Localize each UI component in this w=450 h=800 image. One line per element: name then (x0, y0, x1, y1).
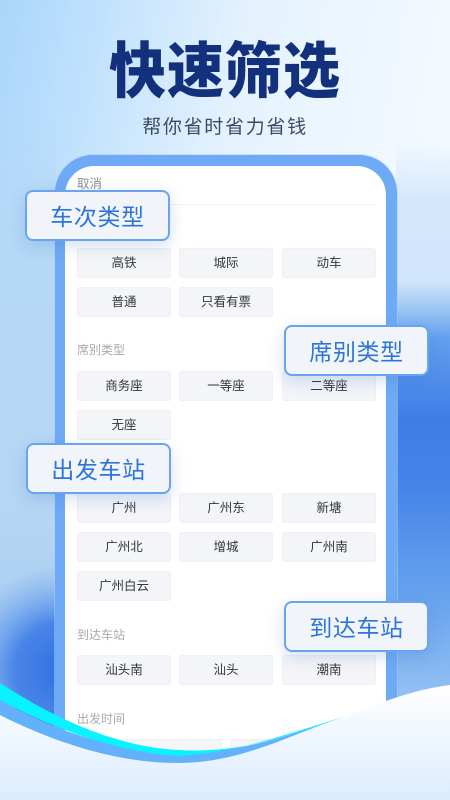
section: departure stations: 增城 (213, 540, 238, 554)
title: 快速筛选 (109, 38, 341, 106)
section: arrival stations: 汕头南 (105, 663, 143, 677)
section: train types: 高铁 (111, 256, 136, 270)
callout: seat type (284, 325, 429, 376)
callout: departure station: 出发车站 (51, 457, 146, 483)
section: seat types: 二等座 (310, 379, 348, 393)
section: train types: 动车 (316, 256, 342, 270)
section: departure stations: 广州南 (310, 540, 348, 554)
callout: train type: 车次类型 (50, 204, 145, 230)
callout: departure station (26, 443, 171, 494)
time chips (117, 739, 270, 750)
section: seat types (77, 371, 376, 440)
section: departure stations: 广州北 (105, 540, 143, 554)
section: departure stations: 广州 (111, 501, 136, 515)
callout: seat type: 席别类型 (309, 339, 404, 365)
section: train types (77, 248, 376, 317)
section: train types: 普通 (111, 295, 136, 309)
section: seat types: 商务座 (105, 379, 143, 393)
phone screen (65, 166, 386, 766)
section: departure stations: 广州白云 (99, 579, 149, 593)
section: departure stations: 广州东 (207, 501, 245, 515)
section: train types: 只看有票 (201, 295, 251, 309)
section heading: arrival station: 到达车站 (77, 628, 125, 642)
callout: train type (25, 190, 170, 241)
cancel label: 取消 (77, 177, 102, 191)
section: arrival stations (77, 655, 376, 685)
section: arrival stations: 潮南 (316, 663, 342, 677)
section: seat types: 一等座 (207, 379, 245, 393)
subtitle: 帮你省时省力省钱 (142, 117, 308, 138)
section heading: departure time: 出发时间 (77, 712, 125, 726)
section: departure stations: 新塘 (316, 501, 342, 515)
callout: arrival station (284, 601, 429, 652)
section: seat types: 无座 (111, 418, 136, 432)
section: departure stations (77, 493, 376, 601)
phone frame (55, 155, 397, 755)
section: arrival stations: 汕头 (213, 663, 238, 677)
section heading: seat type: 席别类型 (77, 343, 125, 357)
section: train types: 城际 (213, 256, 238, 270)
callout: arrival station: 到达车站 (309, 615, 404, 641)
